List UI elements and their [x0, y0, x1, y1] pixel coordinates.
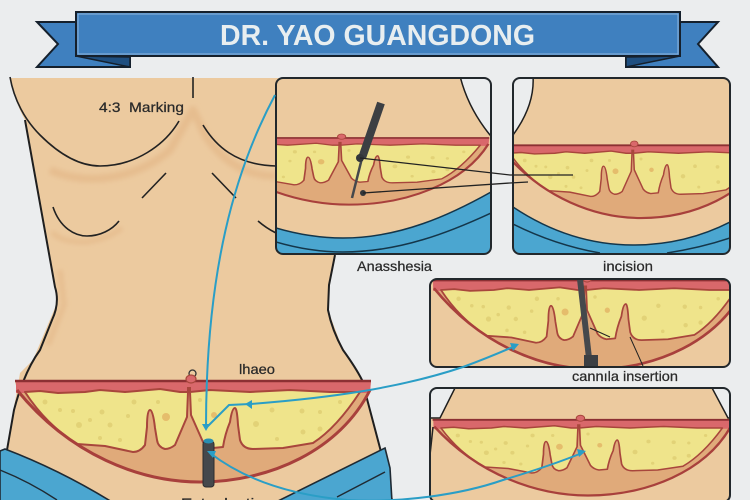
arrow: cannula insertion [206, 343, 519, 428]
panel: anaesthesia [275, 77, 492, 272]
label: lhaeo: lhaeo [239, 361, 275, 377]
ribbon body [76, 12, 680, 56]
label: incision: incision [603, 258, 653, 274]
label: cannula insertion: cannıla insertion [572, 368, 678, 384]
garment [513, 207, 730, 256]
chest and marking lines [10, 77, 276, 236]
right fold [626, 56, 680, 67]
left fold [76, 56, 130, 67]
right garment [276, 448, 392, 500]
callout lines from needle [360, 158, 573, 193]
white corner [514, 79, 534, 135]
fat layer [433, 415, 732, 496]
panel: cannula insertion [430, 275, 745, 384]
skin shading [48, 110, 276, 345]
panel: extraction [430, 386, 732, 500]
label: anasshesia: Anasshesia [357, 258, 432, 274]
garment seams [0, 470, 385, 500]
torso body shape [4, 78, 470, 500]
left ribbon tail [37, 22, 130, 67]
fat layer [277, 134, 490, 206]
navel [189, 370, 196, 377]
left garment [0, 449, 112, 500]
fat layer [432, 280, 729, 366]
title text: DR. YAO GUANGDONG [220, 20, 535, 52]
garment [276, 192, 491, 256]
cannula [580, 279, 598, 367]
right ribbon tail [626, 22, 718, 67]
cannula callouts [590, 328, 643, 366]
fat layer [514, 140, 729, 220]
needle [352, 103, 381, 198]
torso outline [7, 120, 392, 500]
label: marking: 4:3 Marking [99, 99, 184, 115]
arrow: extraction [207, 449, 586, 500]
title banner [37, 12, 718, 67]
white corner [460, 79, 490, 136]
torso illustration [0, 77, 470, 500]
cannula [203, 438, 214, 487]
breast and side lines [262, 163, 276, 233]
panel: incision [512, 77, 731, 272]
arrow: marking to cannula [202, 95, 275, 431]
fat layer cross-section [15, 375, 371, 482]
white corners [431, 389, 456, 419]
